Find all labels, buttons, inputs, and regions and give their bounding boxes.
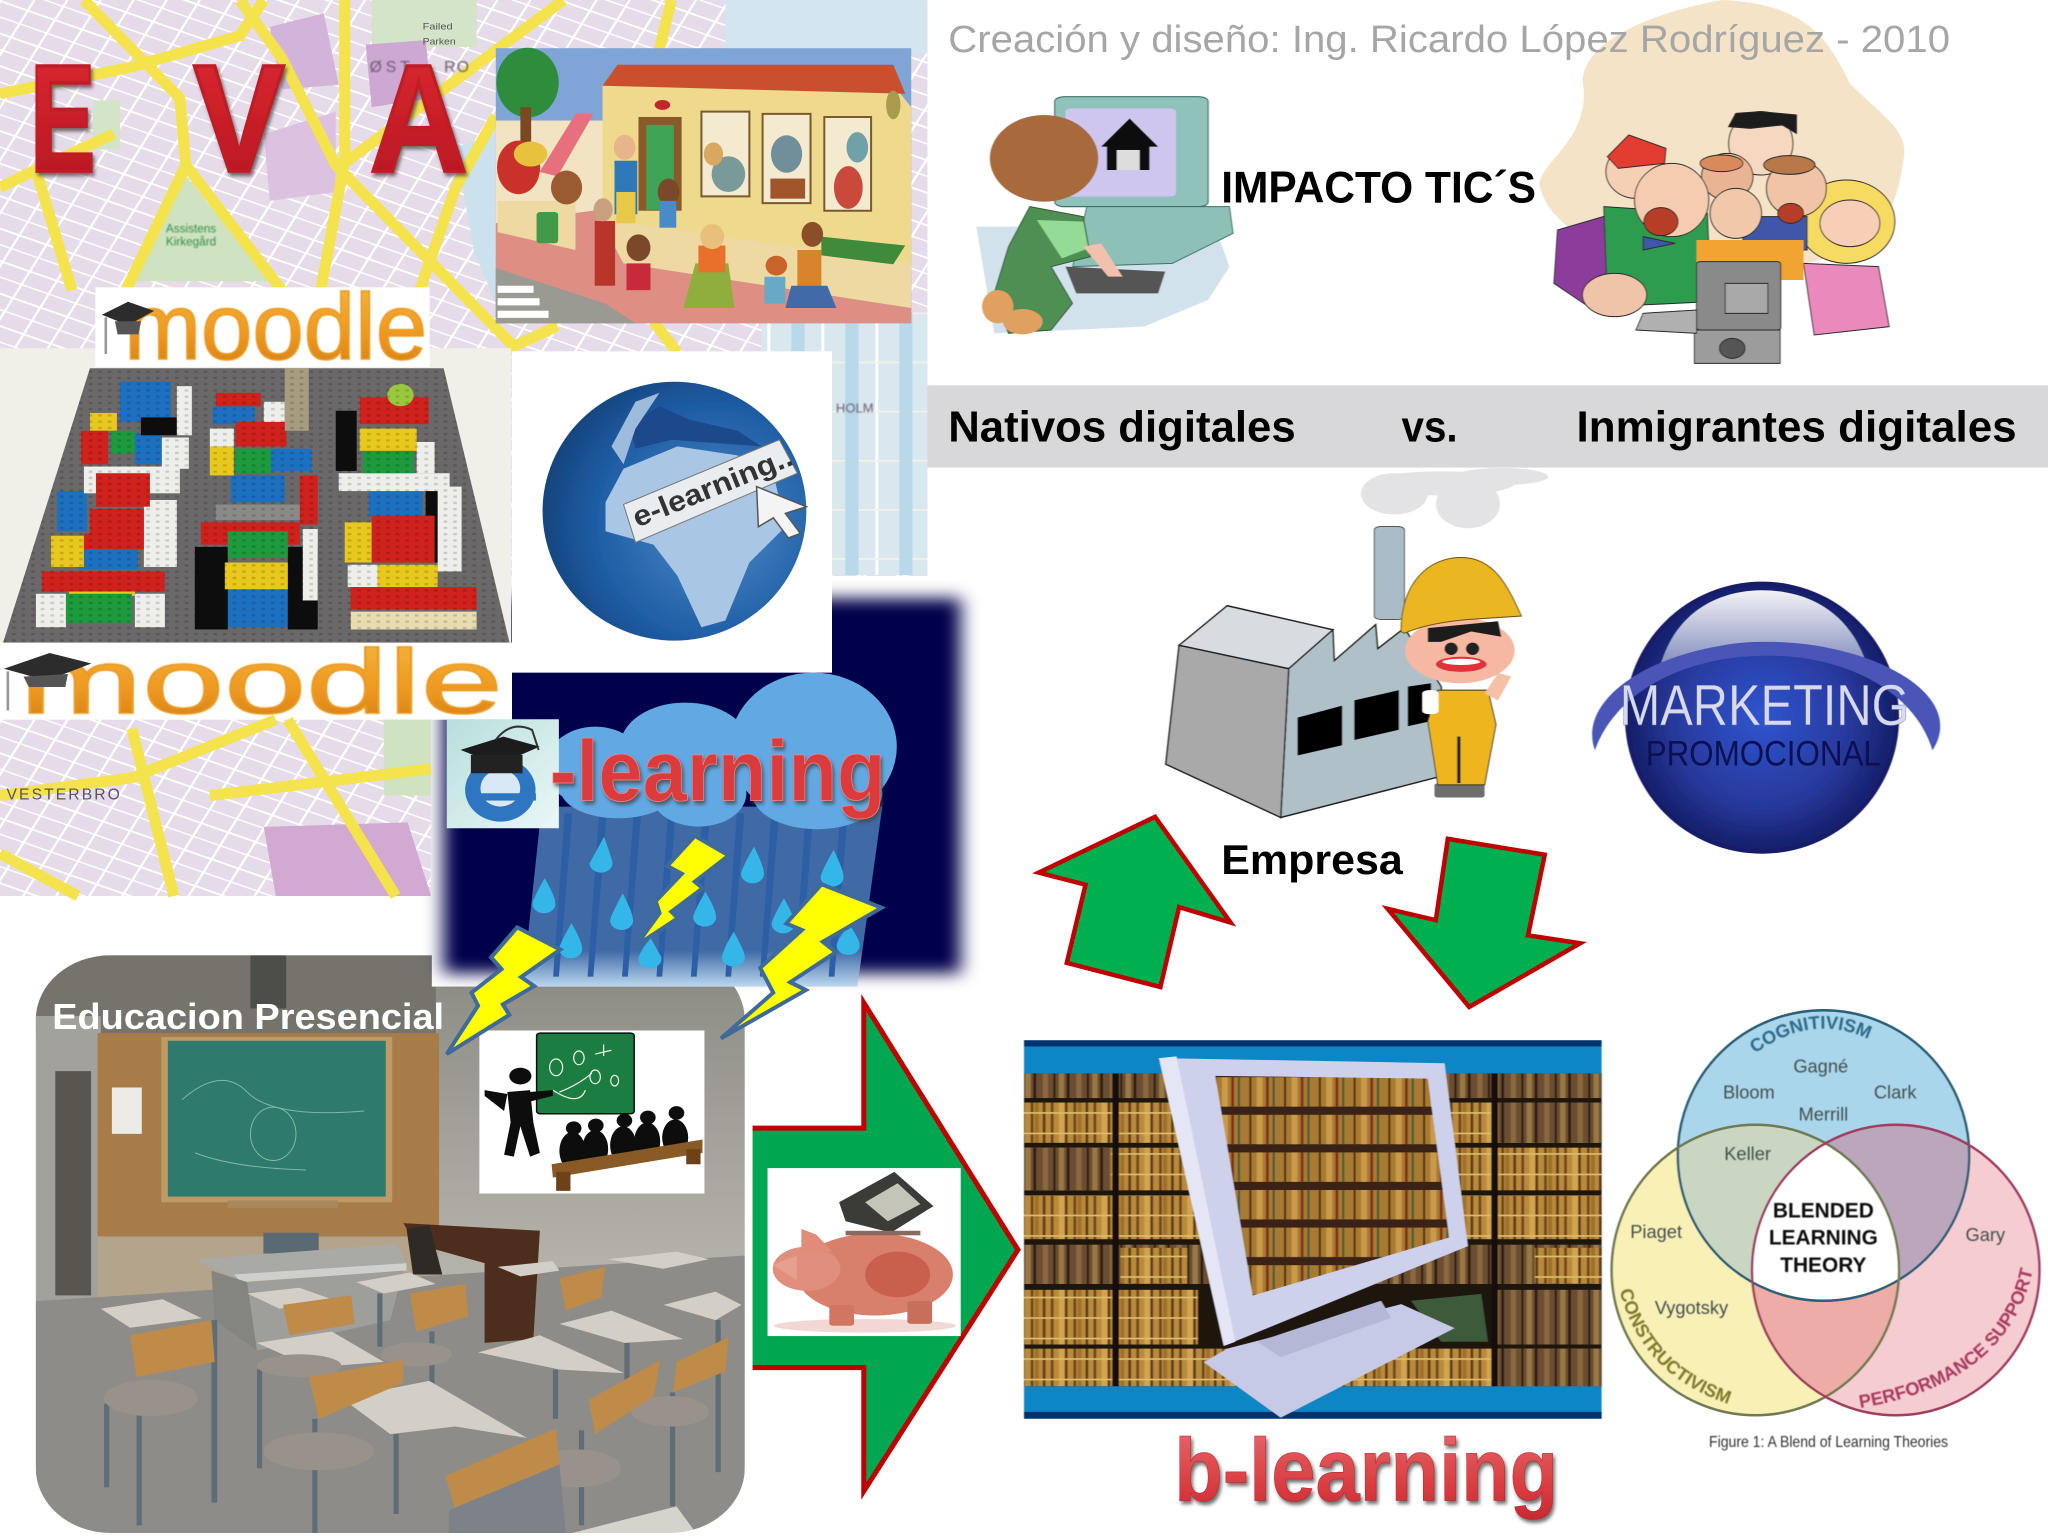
chart: blended learning venn diagram: THEORY (1780, 1254, 1867, 1277)
label: b-learning: b-learning (1174, 1421, 1558, 1520)
logo: marketing promocional sphere: MARKETING (1620, 674, 1910, 738)
chart: blended learning venn diagram: Bloom (1723, 1081, 1775, 1102)
illustration: child at computer (976, 97, 1233, 334)
chart: blended learning venn diagram: Gary (1966, 1224, 2006, 1245)
icon: e-learning logo (447, 719, 559, 828)
icon: piggy bank (768, 1168, 961, 1336)
band: digital natives vs immigrants (927, 385, 2048, 468)
band: digital natives vs immigrants: Inmigrantes digitales (1576, 403, 2017, 451)
EVA title: A (370, 34, 468, 204)
label: Empresa: Empresa (1221, 836, 1404, 883)
chart: blended learning venn diagram: Gagné (1793, 1055, 1848, 1076)
picture: teacher and students (479, 1030, 704, 1194)
chart: blended learning venn diagram: COGNITIVISM (1750, 1015, 1872, 1052)
picture: computer in library (1024, 1040, 1602, 1419)
EVA title (30, 34, 468, 204)
arrow: green down (1388, 839, 1580, 1007)
chart: blended learning venn diagram: Keller (1724, 1143, 1771, 1164)
logo: moodle bottom (0, 631, 512, 733)
panel: classroom photo (36, 955, 745, 1533)
panel: globe e-learning: e-learning.. (628, 441, 797, 534)
panel: globe e-learning (512, 351, 832, 673)
title: credit line (948, 0, 1950, 269)
logo: moodle bottom: moodle (20, 631, 503, 733)
chart: blended learning venn diagram (1610, 1009, 2042, 1452)
chart: blended learning venn diagram: CONSTRUCTIVISM (1620, 1288, 1732, 1404)
map label: Vesterbro: VESTERBRO (7, 786, 122, 803)
icon: lightning bolts (447, 836, 882, 1054)
map background: top left (0, 0, 927, 576)
map labels: ØST (370, 59, 414, 76)
logo: moodle top: moodle (124, 274, 427, 379)
chart: blended learning venn diagram: BLENDED (1773, 1199, 1874, 1222)
picture: school illustration (496, 48, 911, 323)
blob: beige cloud (1540, 0, 1904, 269)
chart: blended learning venn diagram: Merrill (1798, 1104, 1848, 1125)
smoke (1361, 468, 1548, 528)
band: digital natives vs immigrants: vs. (1401, 403, 1458, 451)
map background: top left: Parken (423, 37, 456, 47)
map background: bottom left (0, 720, 431, 896)
illustration: frightened people at computer (1554, 112, 1895, 363)
label: Educacion Presencial: Educacion Presencial (52, 996, 444, 1037)
chart: blended learning venn diagram: Vygotsky (1655, 1297, 1729, 1318)
rain (523, 807, 882, 987)
map background: top left: Failed (423, 22, 453, 32)
arrow: green up (1039, 817, 1231, 987)
map labels: RO (444, 59, 470, 76)
logo: marketing promocional sphere (1592, 582, 1940, 854)
map labels (166, 59, 874, 416)
chart: blended learning venn diagram: PERFORMANCE SUPPORT (1858, 1266, 2032, 1408)
arrow: big green arrow with piggy bank (753, 1003, 1018, 1491)
label: -learning: -learning (550, 724, 886, 820)
map labels: HOLM (836, 401, 874, 416)
chart: blended learning venn diagram: LEARNING (1769, 1227, 1878, 1250)
illustration: factory and worker (1166, 468, 1548, 818)
title: credit line: Creación y diseño: Ing. Ricardo López Rodríguez - 2010 (948, 19, 1950, 61)
chart: blended learning venn diagram: Piaget (1630, 1221, 1682, 1242)
band: digital natives vs immigrants: Nativos digitales (948, 403, 1296, 451)
panel: e-learning rain cloud (432, 587, 982, 987)
chart: blended learning venn diagram: Figure 1: A Blend of Learning Theories (1709, 1434, 1948, 1451)
worker (1401, 557, 1521, 798)
map labels: Kirkegård (166, 236, 216, 249)
heading: IMPACTO TIC'S: IMPACTO TIC´S (1221, 163, 1536, 212)
EVA title: V (193, 34, 285, 204)
EVA title: E (30, 34, 95, 204)
map labels: Assistens (166, 222, 216, 235)
chart: blended learning venn diagram: Clark (1874, 1081, 1917, 1102)
logo: marketing promocional sphere: PROMOCIONAL (1646, 734, 1881, 773)
cloud (545, 673, 897, 829)
picture: lego school model (0, 348, 511, 645)
